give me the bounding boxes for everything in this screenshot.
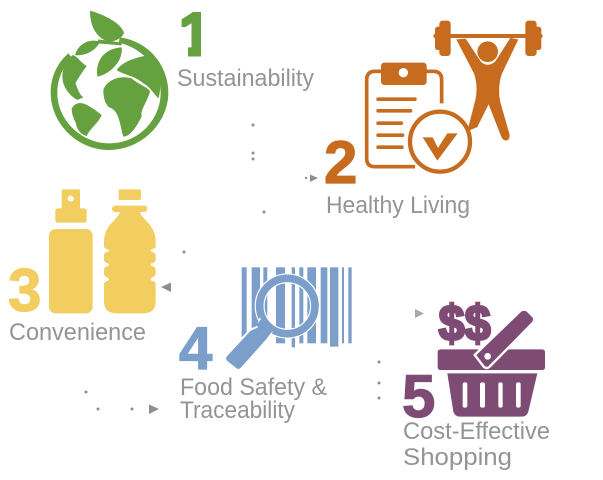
label: Cost-Effective Shopping: Shopping [403,444,512,471]
number 2: 2 [324,129,357,196]
panel: sustainability [51,1,314,150]
label: Sustainability: Sustainability [177,65,314,92]
label: Healthy Living: Healthy Living [326,192,470,219]
label: Food Safety & Traceability: Food Safety & [180,374,327,401]
number 3: 3 [8,257,41,324]
label: Cost-Effective Shopping: Cost-Effective [403,418,550,445]
label: Convenience: Convenience [9,319,146,346]
number 5: 5 [402,363,435,430]
icon: globe with leaves [51,11,168,150]
connector dots and arrows [84,124,424,414]
icon: barcode and magnifying glass [225,267,352,370]
number 4: 4 [179,315,213,382]
icon: weightlifter and clipboard [367,21,543,172]
panel: healthy living [324,21,543,219]
icon: shopping basket with dollar signs: $$ [439,296,491,352]
icon: spray bottle and water bottle [49,189,156,313]
panel: convenience [8,189,156,346]
label: Food Safety & Traceability [180,374,327,424]
number 1: 1 [179,1,212,68]
panel: food safety and traceability [179,267,352,424]
icon: shopping basket with dollar signs [438,296,545,417]
label: Food Safety & Traceability: Traceability [180,397,295,424]
label: Cost-Effective Shopping [403,418,550,471]
panel: cost-effective shopping [402,296,550,471]
